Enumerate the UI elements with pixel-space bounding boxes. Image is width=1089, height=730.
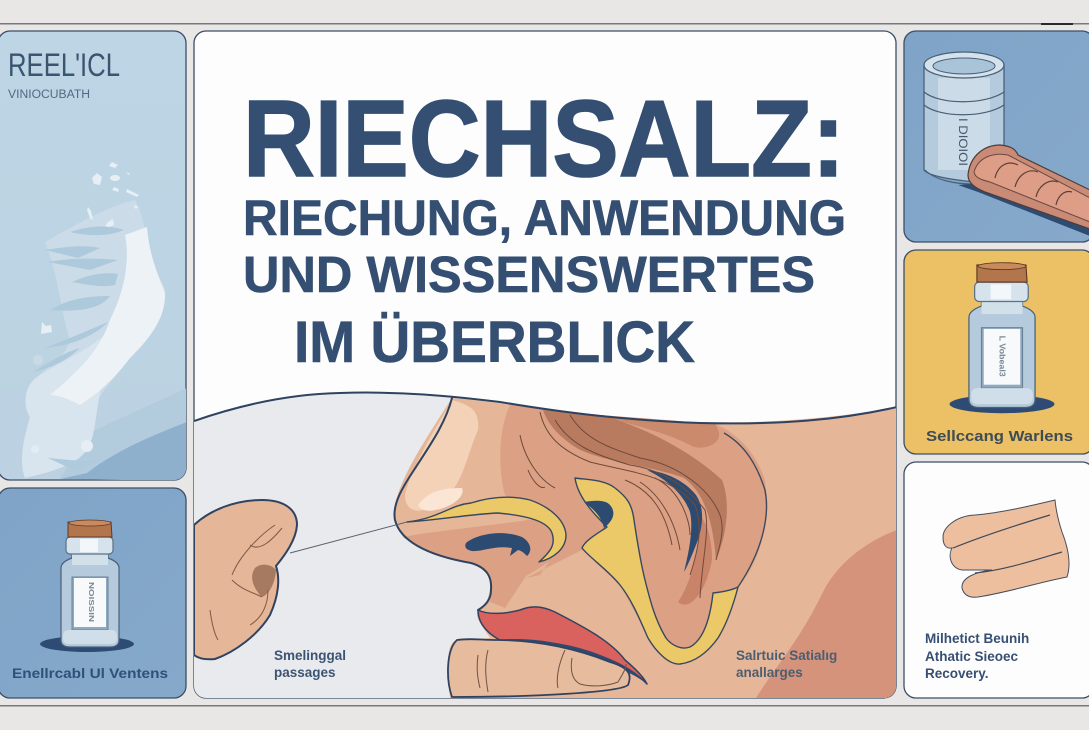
bottle label text: NOISSIN [87, 582, 94, 622]
subheading: VINIOCUBATH [8, 89, 90, 101]
panel: main title and nose [194, 31, 897, 700]
title: RIECHUNG, ANWENDUNG [243, 190, 846, 246]
fist [194, 500, 297, 659]
wrinkle lines [520, 412, 722, 598]
chin fingers [448, 639, 630, 697]
nostril [465, 533, 530, 556]
caption: Recovery. [925, 666, 989, 681]
jar label text: I DIOIOI [956, 118, 970, 166]
splash illustration [22, 162, 187, 481]
label: salt: Salrtuic Satialıg [736, 648, 837, 663]
label: smelling passages: passages [274, 665, 336, 680]
yellow nasal passage [407, 497, 566, 562]
heading: REEL'ICL: REEL'ICL [8, 47, 120, 83]
title: IM ÜBERBLICK [294, 310, 695, 375]
title: RIECHSALZ: [243, 78, 845, 200]
face skin [394, 398, 897, 700]
wave outline [194, 393, 897, 423]
panel: bottle on yellow [904, 250, 1089, 454]
brown band [543, 410, 727, 560]
illustration: nose profile [194, 393, 897, 700]
icon: bottle [950, 263, 1054, 413]
panel: salt splash [0, 31, 187, 481]
bottle label text: L Vobeal3 [998, 336, 1007, 377]
nose outline [394, 398, 491, 610]
title [243, 78, 846, 375]
panel: jar and finger [904, 31, 1089, 242]
caption: Enellrcabl Ul Ventens [12, 666, 168, 681]
label: salt: anallarges [736, 665, 803, 680]
panel: bottle on blue [0, 488, 186, 698]
lips [478, 607, 647, 684]
nose highlight [405, 400, 478, 511]
thin pointer line [290, 522, 407, 553]
icon: fingers [943, 500, 1069, 597]
icon: bottle [40, 520, 134, 652]
caption: Sellccang Warlens [926, 428, 1073, 445]
label: smelling passages: Smelinggal [274, 648, 346, 663]
caption: Athatic Sieoec [925, 649, 1019, 664]
caption: Milhetict Beunih [925, 631, 1029, 646]
cheek shading [500, 405, 766, 655]
icon: jar with finger [924, 52, 1089, 236]
title: UND WISSENSWERTES [243, 246, 815, 303]
panel: hand and recovery [904, 462, 1089, 698]
